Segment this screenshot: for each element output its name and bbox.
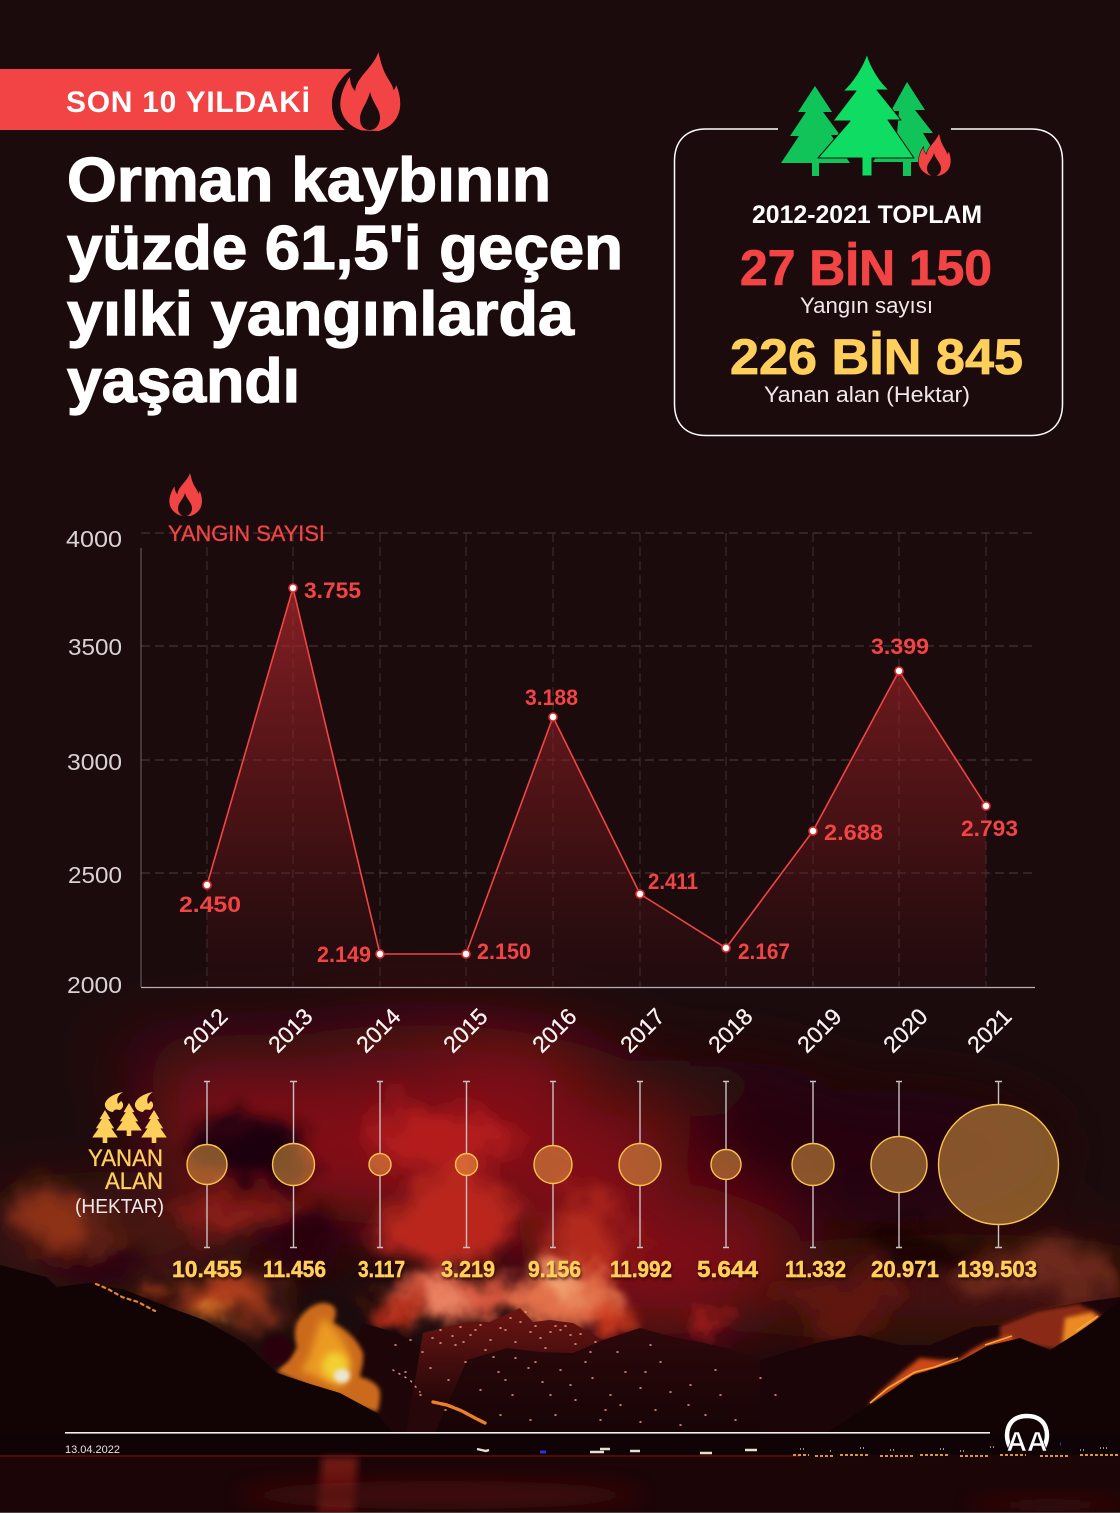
- fire: hillside flame: [262, 1303, 380, 1412]
- number: burned area: 226 BİN 845: [730, 329, 1023, 385]
- value labels: 2.793: [961, 816, 1018, 841]
- banner: [0, 69, 352, 130]
- chart legend: fire count: YANGIN SAYISI: [168, 521, 325, 546]
- bubble values: 11.456: [263, 1256, 326, 1282]
- water and reflections: [0, 1455, 1120, 1513]
- sparks on mountain: [395, 1312, 776, 1425]
- value labels: 2.450: [179, 892, 241, 917]
- x axis years: 2016: [527, 1003, 582, 1058]
- line chart: fire count: [66, 526, 1035, 1058]
- y axis labels: 2000: [67, 972, 122, 998]
- bubble values: 11.992: [610, 1256, 672, 1282]
- x axis years: 2012: [178, 1003, 233, 1058]
- bubble values: 139.503: [957, 1256, 1037, 1282]
- y axis labels: 2500: [68, 862, 122, 888]
- x axis years: 2021: [962, 1003, 1017, 1058]
- x axis years: 2015: [438, 1003, 493, 1058]
- value labels: 2.411: [648, 869, 698, 894]
- title: Orman kaybının: [67, 146, 551, 215]
- legend: burned area: (HEKTAR): [75, 1196, 164, 1218]
- bubble values: 11.332: [785, 1256, 846, 1282]
- title: yüzde 61,5'i geçen: [67, 214, 623, 283]
- fire: right ridge: [867, 1304, 1102, 1406]
- mountain: right hill behind fire: [760, 1297, 1120, 1456]
- bubble values: 10.455: [172, 1256, 242, 1282]
- logo: AA: AA: [1006, 1426, 1048, 1457]
- value labels: 2.150: [477, 939, 531, 964]
- bubble stems: [204, 1081, 1002, 1248]
- y axis labels: 4000: [66, 526, 122, 552]
- value labels: 2.149: [317, 942, 371, 967]
- icon: green trees with flame: [781, 54, 951, 176]
- x axis years: 2013: [263, 1003, 318, 1058]
- x axis years: 2020: [878, 1003, 933, 1058]
- title: [67, 146, 623, 416]
- title: yaşandı: [67, 347, 300, 416]
- bubble chart: burned area: [172, 1081, 1058, 1282]
- bubble values: 5.644: [697, 1256, 758, 1282]
- value labels: 3.399: [871, 634, 929, 659]
- bubble values: 3.219: [441, 1256, 495, 1282]
- legend: burned area: [75, 1145, 164, 1218]
- x axis years: 2018: [703, 1003, 758, 1058]
- label: fire count: Yangın sayısı: [800, 293, 933, 318]
- bubble values: 20.971: [871, 1256, 939, 1282]
- chart area fill: [207, 588, 986, 987]
- date: 13.04.2022: [65, 1444, 120, 1456]
- title: yılki yangınlarda: [67, 280, 575, 349]
- banner text: SON 10 YILDAKİ: [66, 86, 310, 119]
- mountain: centre front: [425, 1328, 880, 1455]
- value labels: 2.167: [738, 939, 790, 964]
- chart line: [207, 588, 986, 954]
- legend: burned area: ALAN: [105, 1168, 163, 1195]
- x axis years: [178, 1003, 1017, 1058]
- panel: total summary: [674, 54, 1062, 436]
- mountain: sparkling ridges: [405, 1308, 640, 1440]
- mountain: right front hill: [790, 1300, 1120, 1456]
- chart points: [203, 584, 990, 958]
- icon: chart flame: [169, 473, 202, 516]
- icon: banner flame: [332, 52, 400, 133]
- y axis labels: [66, 526, 122, 998]
- x axis years: 2019: [792, 1003, 847, 1058]
- footer rule: [65, 1432, 990, 1434]
- label: burned area: Yanan alan (Hektar): [764, 382, 970, 407]
- bubbles: [187, 1104, 1058, 1224]
- y axis labels: 3500: [68, 634, 122, 660]
- x axis years: 2014: [351, 1003, 406, 1058]
- x axis years: 2017: [615, 1003, 670, 1058]
- value labels: [179, 578, 1018, 967]
- number: fire count: 27 BİN 150: [740, 240, 992, 296]
- shoreline lights: [477, 1444, 1118, 1456]
- value labels: 3.188: [525, 685, 578, 710]
- heading: period total: 2012-2021 TOPLAM: [752, 201, 982, 229]
- icon: burning trees: [92, 1092, 167, 1143]
- bubble values: [172, 1256, 1037, 1282]
- fire: right ridge highlights: [870, 1316, 1098, 1403]
- value labels: 3.755: [304, 578, 361, 603]
- legend: burned area: YANAN: [88, 1145, 163, 1172]
- bubble values: 9.156: [528, 1256, 581, 1282]
- bubble values: 3.117: [358, 1256, 405, 1282]
- mountain: dark back hill: [300, 1323, 560, 1455]
- y axis labels: 3000: [67, 749, 122, 775]
- fire: ridge sparks: [96, 1284, 485, 1423]
- value labels: 2.688: [824, 820, 883, 845]
- mountain: left hill: [0, 1265, 410, 1455]
